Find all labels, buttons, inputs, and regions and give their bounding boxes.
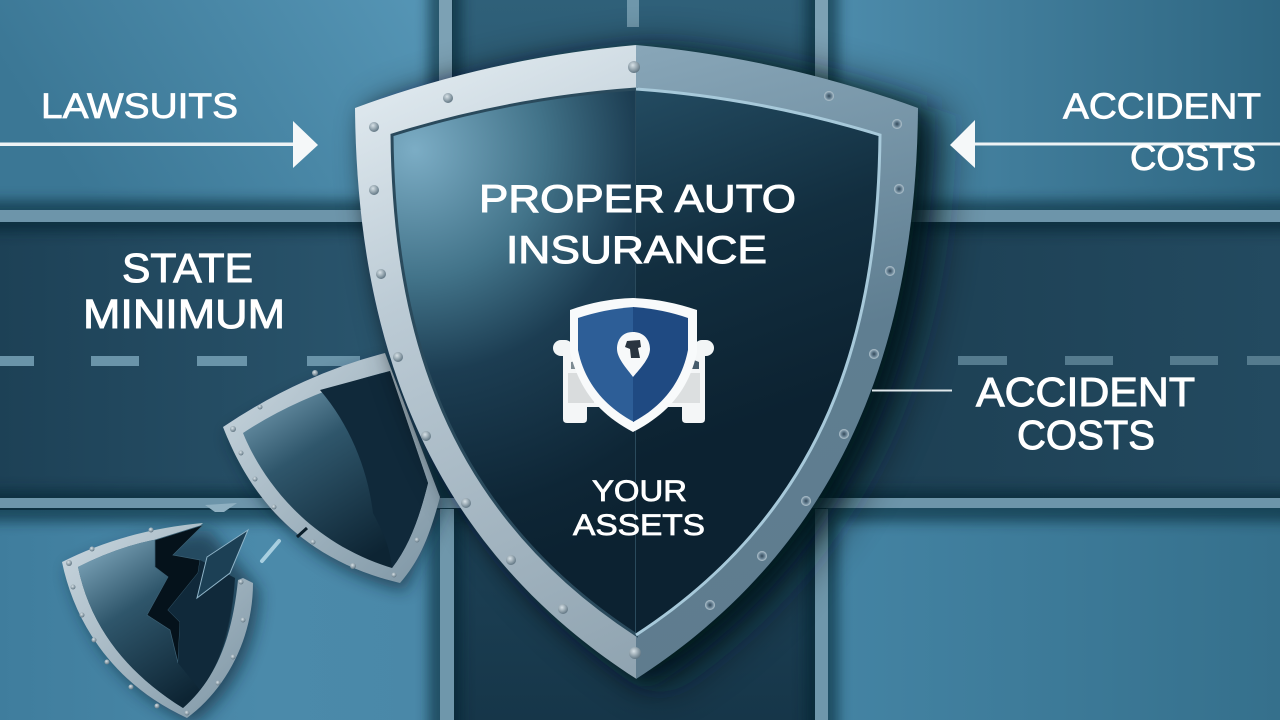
- broken shield: [62, 523, 279, 720]
- arrow: lawsuits: [0, 121, 318, 168]
- label: lawsuits: LAWSUITS: [41, 87, 238, 126]
- label: accident costs top: ACCIDENT: [1063, 86, 1261, 126]
- label: state minimum: MINIMUM: [83, 291, 285, 337]
- label: accident costs right: [976, 369, 1195, 458]
- label: state minimum: [83, 245, 285, 337]
- shield frame: [355, 45, 918, 679]
- label: state minimum: STATE: [122, 245, 253, 291]
- callout line: [872, 390, 952, 392]
- label: accident costs right: ACCIDENT: [976, 369, 1195, 415]
- main shield title line 2: INSURANCE: [506, 229, 767, 272]
- your assets label: YOUR: [592, 475, 687, 508]
- label: accident costs right: COSTS: [1017, 412, 1155, 458]
- shield face: [392, 89, 880, 635]
- label: accident costs top: [1063, 86, 1261, 178]
- rivets: [369, 61, 904, 659]
- label: accident costs top: COSTS: [1130, 137, 1256, 178]
- your assets label line 2: ASSETS: [573, 509, 705, 542]
- arrow: accident costs: [950, 120, 1280, 168]
- main shield title: PROPER AUTO: [479, 178, 796, 221]
- icon: car with shield: [553, 298, 714, 432]
- main shield: [355, 45, 942, 687]
- small intact shield: [223, 353, 445, 591]
